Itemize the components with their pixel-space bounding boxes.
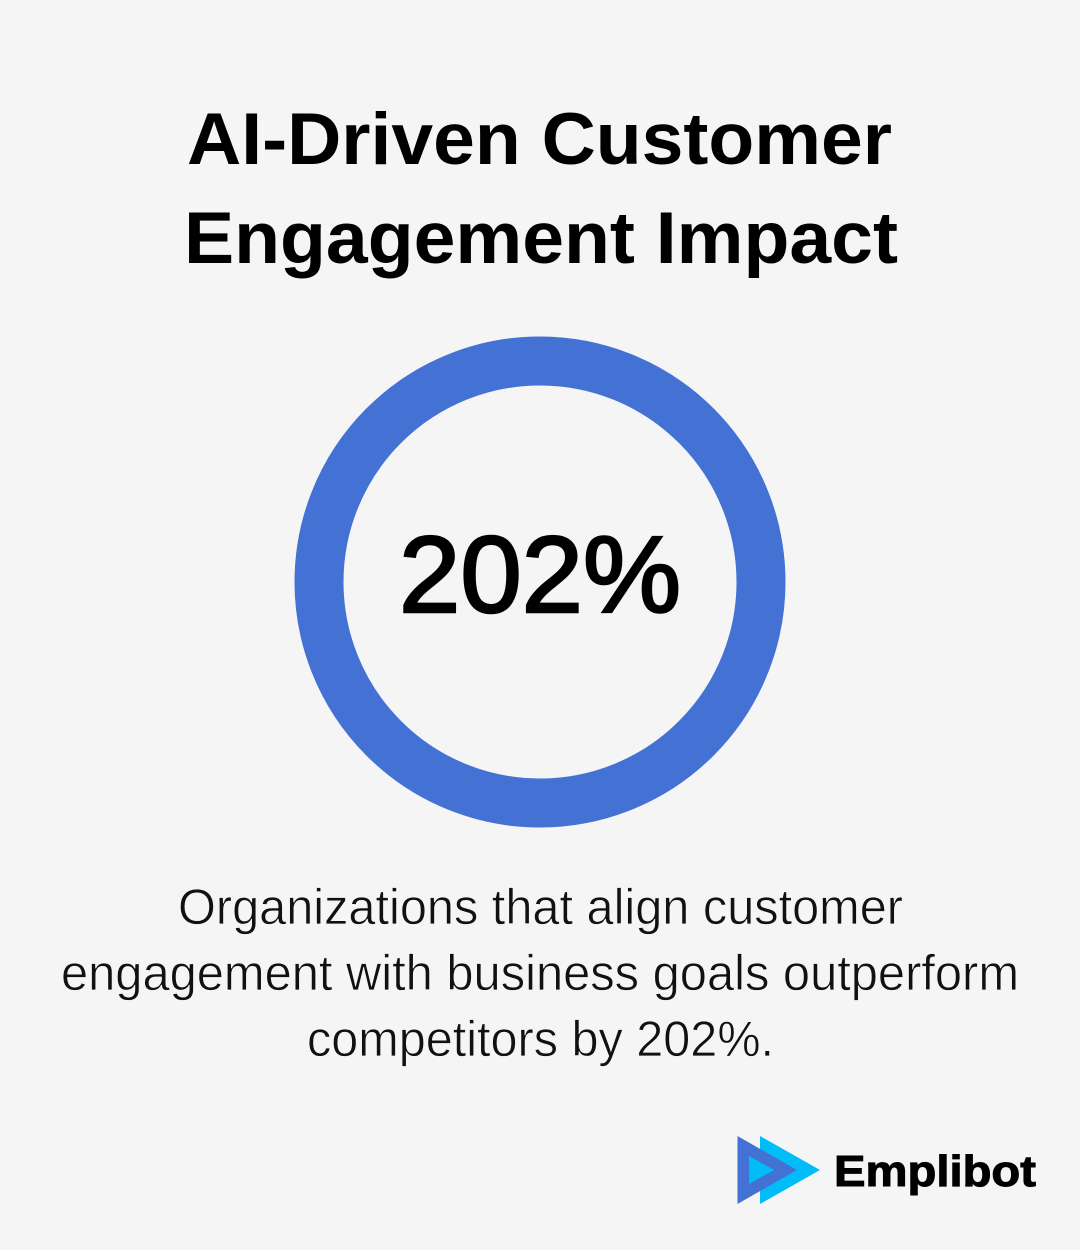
description text: engagement with business goals outperform (61, 945, 1019, 1001)
description text: competitors by 202%. (307, 1011, 774, 1067)
title: Engagement Impact (184, 198, 898, 279)
wordmark: Emplibot (834, 1147, 1036, 1196)
icon: play triangles (738, 1136, 820, 1204)
title: AI-Driven Customer (187, 99, 892, 180)
donut chart: 202% (319, 361, 761, 803)
title (184, 99, 898, 279)
logo: Emplibot (738, 1136, 1036, 1204)
description text (61, 879, 1019, 1067)
donut value: 202% (399, 514, 681, 636)
description text: Organizations that align customer (178, 879, 903, 935)
